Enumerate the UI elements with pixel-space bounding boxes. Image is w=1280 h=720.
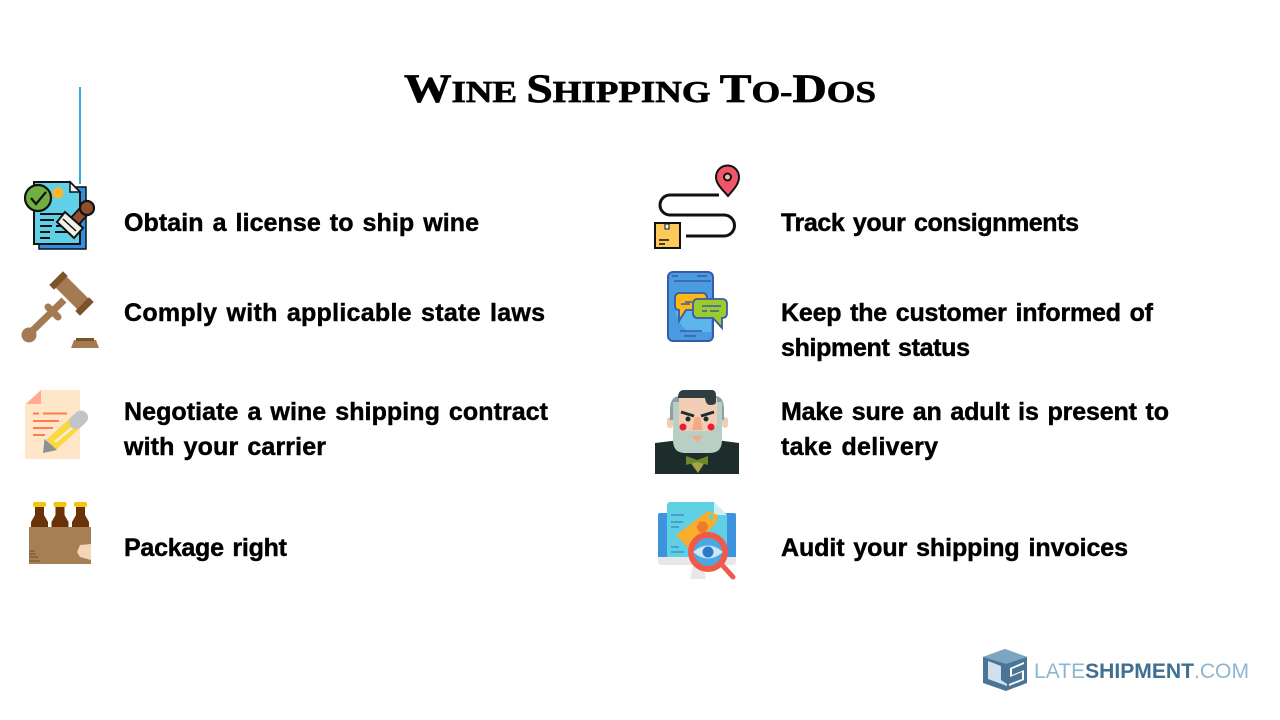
text: adult present, line two: take delivery	[781, 433, 938, 461]
item: audit invoices	[658, 502, 1128, 579]
text: negotiate contract, line one: Negotiate a wine shipping contract	[124, 398, 549, 426]
title: WINE SHIPPING TO-DOS	[404, 66, 876, 111]
item: keep customer informed	[668, 272, 1154, 362]
text: obtain a license: Obtain a license to ship wine	[124, 209, 479, 237]
item: adult present	[655, 390, 1169, 474]
item: package right	[29, 502, 288, 564]
item: comply with laws	[22, 272, 545, 348]
text: adult present, line one: Make sure an adult is present to	[781, 398, 1169, 426]
text: keep customer informed, line two: shipment status	[781, 334, 970, 362]
icon: monitor with tag and magnifier	[658, 502, 736, 579]
text: audit invoices: Audit your shipping invoices	[781, 534, 1128, 562]
icon: licence document with stamp	[25, 182, 94, 249]
icon: bottle carrier	[29, 502, 91, 564]
text: track consignments: Track your consignments	[781, 209, 1079, 237]
item: track consignments	[655, 166, 1079, 248]
item: obtain a license	[25, 182, 479, 249]
logo wordmark: LATESHIPMENT.COM	[1034, 660, 1249, 683]
logo cube mark	[983, 649, 1027, 691]
icon: route with pin and parcel	[655, 166, 739, 248]
icon: phone with chat bubbles	[668, 272, 727, 341]
logo: LateShipment.com	[983, 649, 1249, 691]
text: comply with laws: Comply with applicable state laws	[124, 299, 545, 327]
text: package right: Package right	[124, 534, 288, 562]
icon: older man portrait	[655, 390, 739, 474]
blue connector line	[79, 87, 81, 184]
icon: contract and pencil	[25, 390, 81, 459]
item: negotiate contract	[25, 390, 549, 461]
text: negotiate contract, line two: with your carrier	[123, 433, 326, 461]
icon: gavel	[22, 272, 99, 348]
text: keep customer informed, line one: Keep the customer informed of	[781, 299, 1154, 327]
